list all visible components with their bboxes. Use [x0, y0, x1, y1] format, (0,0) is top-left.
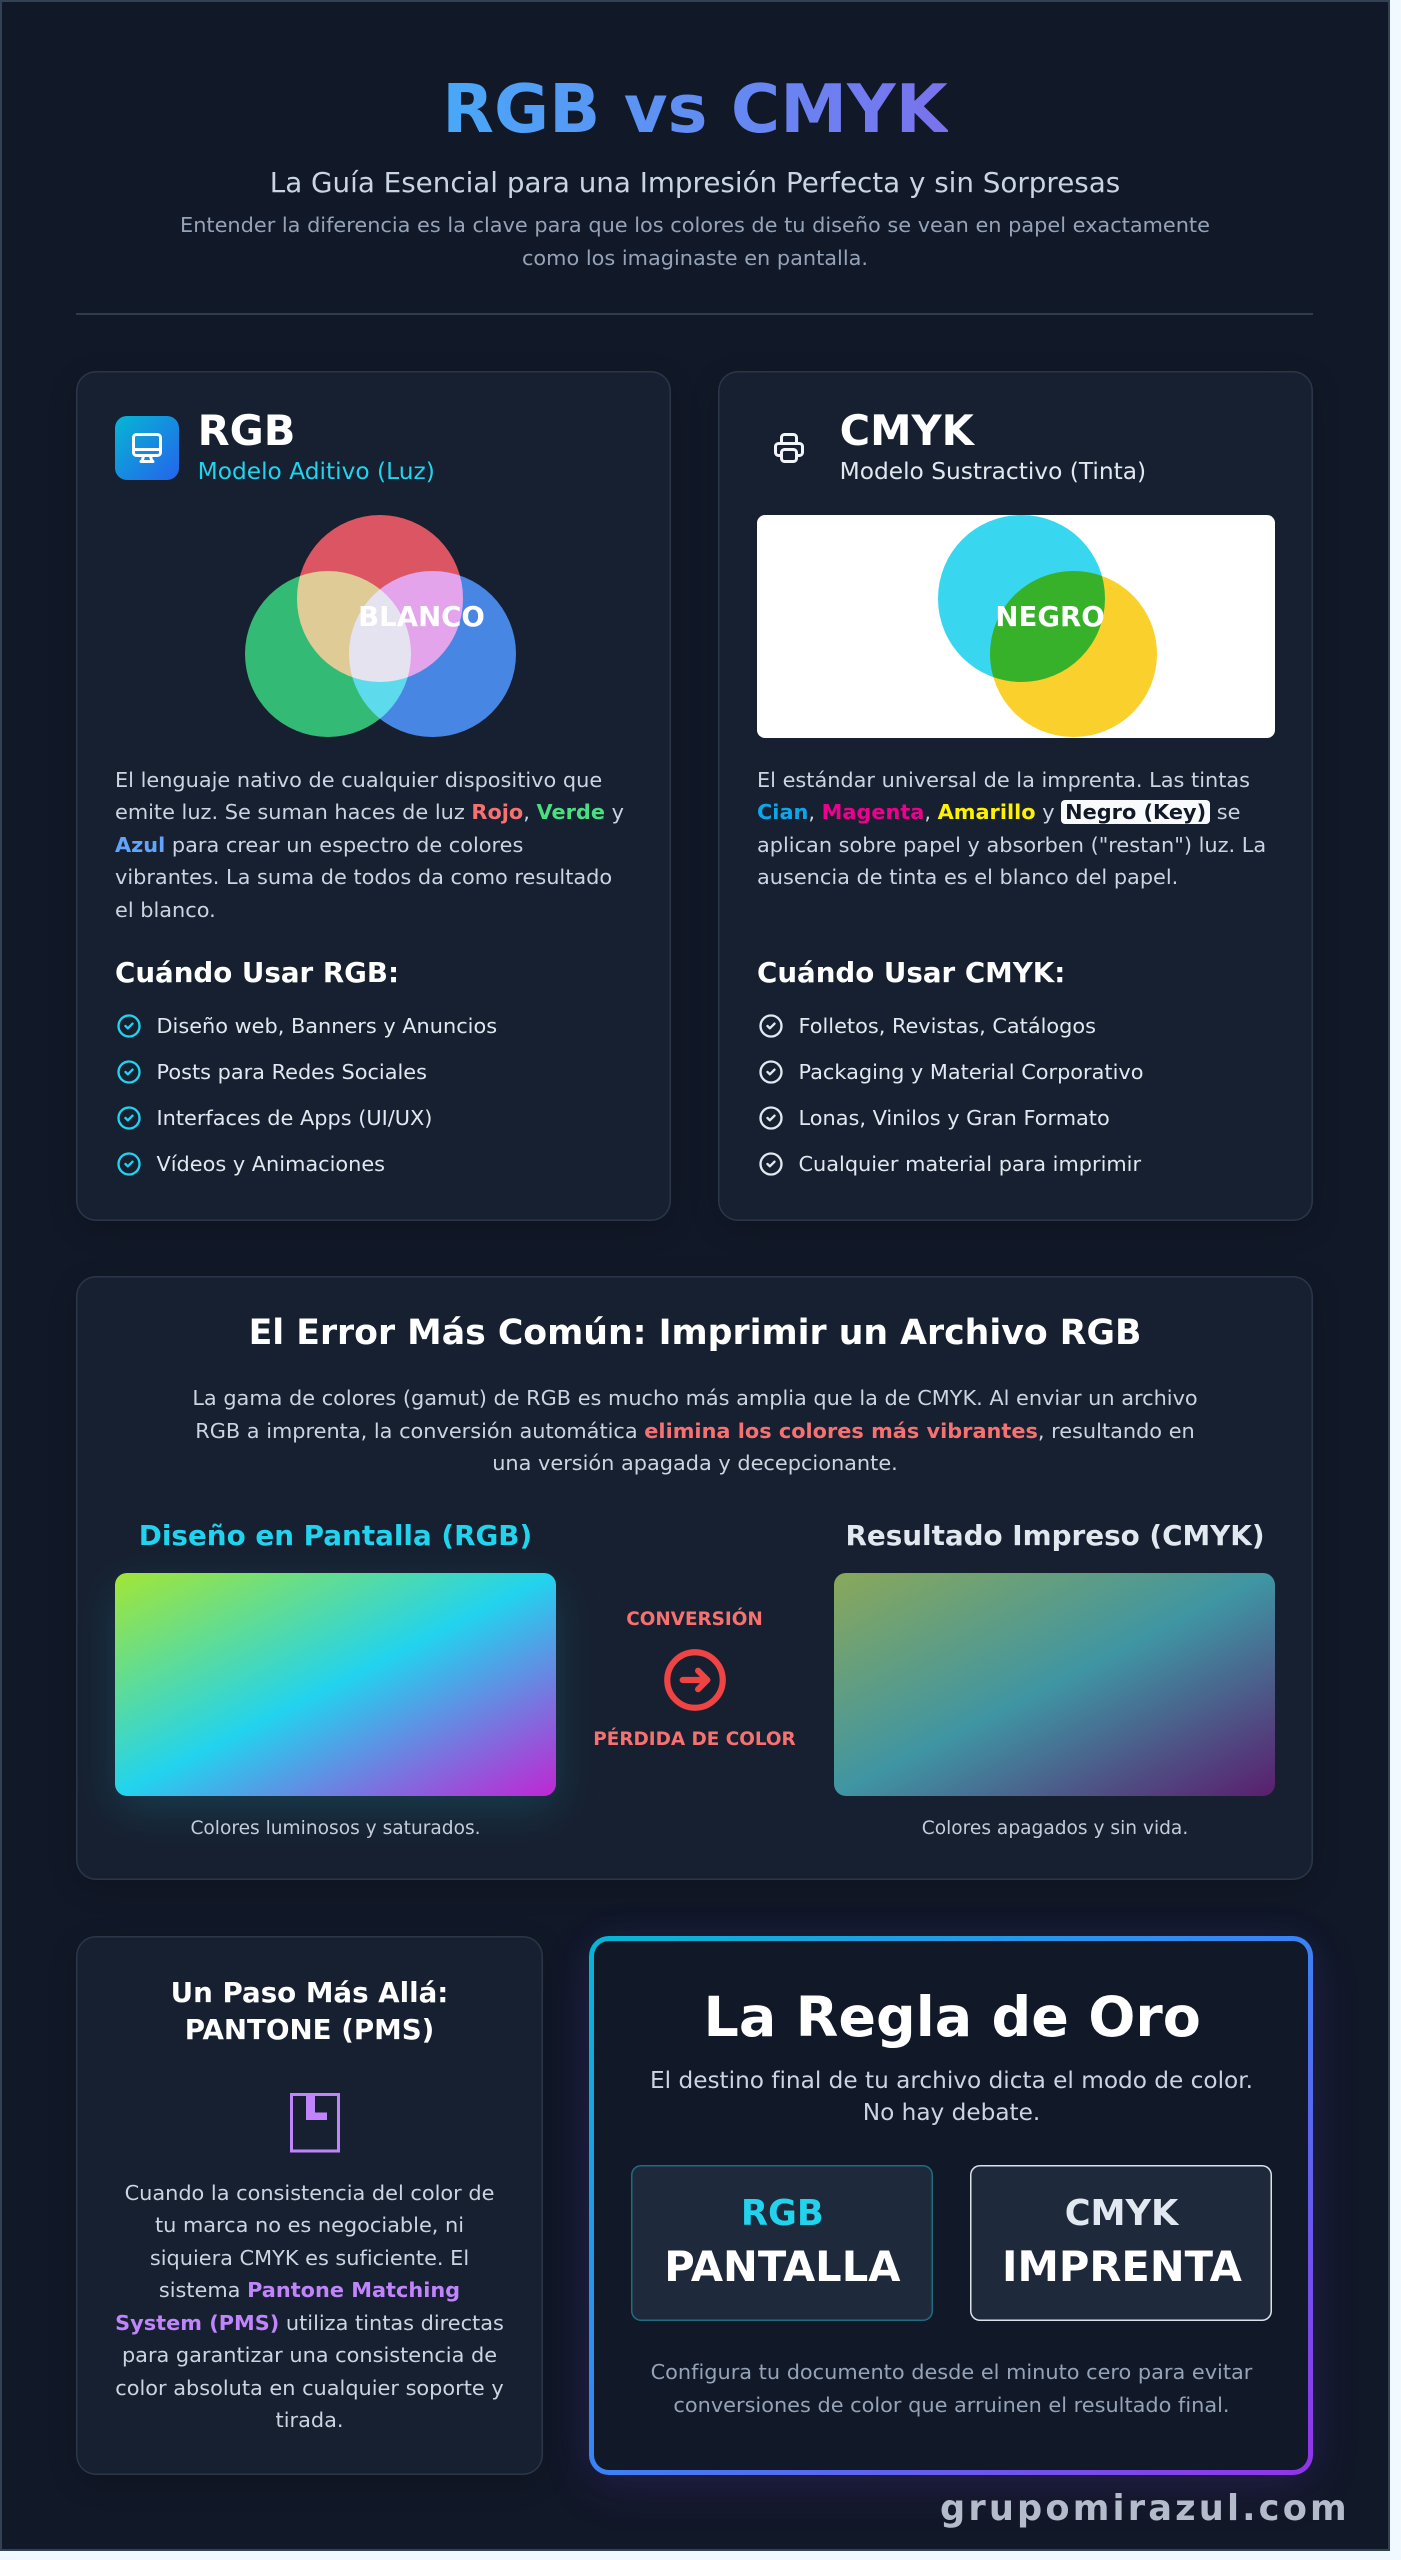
panel: common error [76, 1276, 1313, 1880]
description [757, 768, 1266, 889]
description: El lenguaje nativo de cualquier dispositivo que [115, 768, 602, 792]
explanation [192, 1386, 1198, 1475]
description: Azul para crear un espectro de colores [115, 833, 523, 857]
watermark: grupomirazul.com [940, 2488, 1350, 2528]
heading: when to use RGB: Cuándo Usar RGB: [115, 956, 399, 989]
description [115, 768, 624, 922]
panel: golden rule [589, 1936, 1312, 2475]
checklist: CMYK uses: Folletos, Revistas, Catálogos [798, 1014, 1096, 1038]
explanation: una versión apagada y decepcionante. [492, 1451, 898, 1475]
heading: common error: El Error Más Común: Imprimir un Archivo RGB [249, 1313, 1141, 1353]
closing note: Configura tu documento desde el minuto cero para evitar [651, 2360, 1252, 2384]
label: screen: PANTALLA [664, 2242, 900, 2291]
explanation: La gama de colores (gamut) de RGB es mucho más amplia que la de CMYK. Al enviar un archivo [192, 1386, 1198, 1410]
label: conversion: CONVERSIÓN [626, 1609, 763, 1630]
label: print: IMPRENTA [1002, 2242, 1242, 2291]
label: screen design: Diseño en Pantalla (RGB) [139, 1519, 532, 1552]
description: color absoluta en cualquier soporte y [115, 2376, 504, 2400]
icon: pantone swatch [290, 2093, 340, 2152]
subheading: subtractive model: Modelo Sustractivo (Tinta) [840, 458, 1146, 484]
rule statement: No hay debate. [863, 2099, 1040, 2126]
description: ausencia de tinta es el blanco del papel. [757, 865, 1178, 889]
card: RGB screen [631, 2165, 933, 2321]
diagram: additive colour circles: BLANCO [358, 600, 485, 633]
caption: RGB result: Colores luminosos y saturados. [190, 1818, 481, 1839]
heading: golden rule: La Regla de Oro [703, 1985, 1201, 2050]
description: Cuando la consistencia del color de [125, 2181, 494, 2205]
description: tirada. [276, 2408, 343, 2432]
heading: when to use CMYK: Cuándo Usar CMYK: [757, 956, 1065, 989]
intro text [180, 213, 1210, 270]
icon: monitor [114, 416, 178, 480]
description: para garantizar una consistencia de [122, 2343, 497, 2367]
description: El estándar universal de la imprenta. Las tintas [757, 768, 1250, 792]
checklist: CMYK uses [759, 1014, 1143, 1176]
description: vibrantes. La suma de todos da como resultado [115, 865, 612, 889]
checklist: RGB uses: Diseño web, Banners y Anuncios [156, 1014, 497, 1038]
icon: printer [774, 433, 804, 463]
description: Cian, Magenta, Amarillo y Negro (Key) se [757, 800, 1240, 824]
description: System (PMS) utiliza tintas directas [115, 2311, 504, 2335]
checklist: RGB uses: Posts para Redes Sociales [156, 1060, 427, 1084]
panel: RGB [76, 370, 671, 1221]
checklist: RGB uses: Vídeos y Animaciones [156, 1152, 385, 1176]
description: sistema Pantone Matching [159, 2278, 460, 2302]
description: emite luz. Se suman haces de luz Rojo, Verde y [115, 800, 624, 824]
panel: pantone [76, 1936, 543, 2475]
closing note [651, 2360, 1252, 2417]
label: CMYK: CMYK [1065, 2193, 1178, 2234]
caption: CMYK result: Colores apagados y sin vida. [922, 1818, 1188, 1839]
label: colour loss: PÉRDIDA DE COLOR [593, 1729, 796, 1750]
panel: CMYK [718, 370, 1313, 1221]
subheading: additive model: Modelo Aditivo (Luz) [198, 458, 435, 484]
rule statement [650, 2067, 1253, 2126]
card: CMYK print [970, 2165, 1272, 2321]
heading: RGB: RGB [198, 406, 295, 454]
checklist: CMYK uses: Packaging y Material Corporativo [798, 1060, 1143, 1084]
subtitle: La Guía Esencial para una Impresión Perfecta y sin Sorpresas [270, 166, 1120, 199]
checklist: RGB uses [117, 1014, 497, 1176]
closing note: conversiones de color que arruinen el resultado final. [673, 2393, 1230, 2417]
checklist: CMYK uses: Lonas, Vinilos y Gran Formato [798, 1106, 1110, 1130]
gradient: muted CMYK swatch [834, 1573, 1274, 1796]
description: el blanco. [115, 898, 216, 922]
description [115, 2181, 504, 2432]
label: printed result: Resultado Impreso (CMYK) [845, 1519, 1265, 1552]
explanation: RGB a imprenta, la conversión automática elimina los colores más vibrantes, resultando en [195, 1419, 1195, 1443]
checklist: CMYK uses: Cualquier material para imprimir [798, 1152, 1141, 1176]
description: tu marca no es negociable, ni [155, 2213, 464, 2237]
label: RGB: RGB [741, 2193, 824, 2234]
diagram: subtractive colour circles [756, 515, 1275, 738]
rule statement: El destino final de tu archivo dicta el modo de color. [650, 2067, 1253, 2094]
heading: pantone: PANTONE (PMS) [185, 2013, 434, 2046]
description: aplican sobre papel y absorben ("restan") luz. La [757, 833, 1266, 857]
intro text: Entender la diferencia es la clave para que los colores de tu diseño se vean en papel exactamente [180, 213, 1210, 237]
intro text: como los imaginaste en pantalla. [522, 246, 868, 270]
description: siquiera CMYK es suficiente. El [150, 2246, 469, 2270]
title: RGB vs CMYK [442, 70, 948, 148]
gradient: vivid RGB swatch [114, 1573, 556, 1796]
diagram: subtractive colour circles: NEGRO [995, 600, 1105, 633]
heading: pantone [171, 1976, 448, 2046]
heading: pantone: Un Paso Más Allá: [171, 1976, 448, 2009]
icon: arrow [664, 1649, 726, 1711]
heading: CMYK: CMYK [840, 406, 974, 454]
diagram: additive colour circles [245, 515, 516, 737]
checklist: RGB uses: Interfaces de Apps (UI/UX) [156, 1106, 432, 1130]
